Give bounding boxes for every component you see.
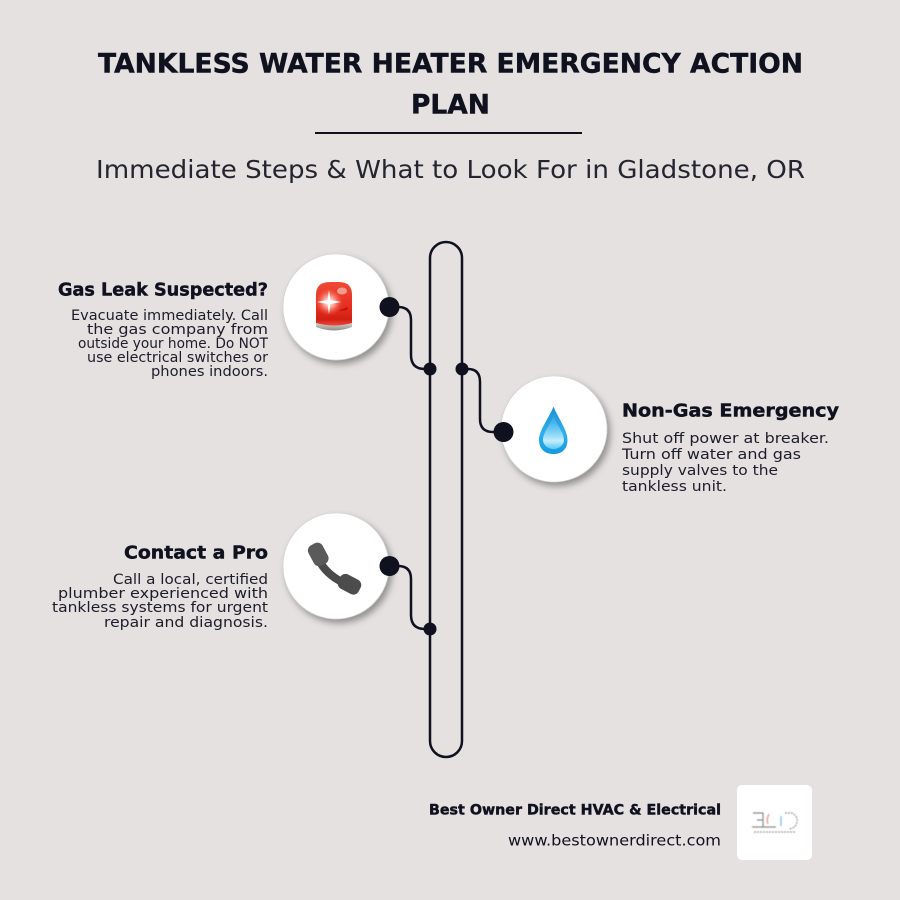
text: gas leak body [71, 308, 268, 380]
connector: contact a pro to track [389, 566, 436, 636]
title [98, 48, 803, 120]
icon circle: non-gas [501, 376, 607, 482]
icon: telephone handset [306, 541, 363, 597]
logo card [737, 785, 812, 860]
icon: red siren [315, 282, 352, 330]
connector: non-gas to track [456, 362, 503, 432]
title underline [315, 132, 582, 134]
text: contact body [52, 572, 268, 631]
panel: contact a pro [52, 513, 389, 631]
text: gas leak heading: Gas Leak Suspected? [58, 280, 268, 300]
text: contact body: Call a local, certified [113, 572, 268, 588]
text: contact body: plumber experienced with [58, 586, 268, 602]
panel: gas leak [58, 254, 389, 380]
footer company name: Best Owner Direct HVAC & Electrical [429, 802, 721, 818]
text: gas leak body: the gas company from [87, 322, 268, 338]
text: non-gas body: tankless unit. [622, 479, 727, 495]
text: contact body: repair and diagnosis. [104, 615, 268, 631]
icon circle: gas leak [283, 254, 389, 360]
connector: gas leak to track [389, 307, 436, 376]
central timeline track [430, 242, 462, 757]
text: non-gas body: Shut off power at breaker. [622, 431, 829, 447]
panel: non-gas emergency [501, 376, 839, 495]
text: non-gas body: Turn off water and gas [621, 447, 801, 463]
icon circle: contact [283, 513, 389, 619]
icon: water drop [539, 406, 568, 454]
text: non-gas heading: Non-Gas Emergency [622, 400, 839, 422]
text: non-gas body: supply valves to the [622, 463, 778, 479]
footer website: www.bestownerdirect.com [508, 832, 721, 850]
large connector dots [380, 297, 514, 576]
text: gas leak body: phones indoors. [151, 364, 268, 380]
text: contact body: tankless systems for urgent [52, 600, 268, 616]
text: contact heading: Contact a Pro [124, 542, 268, 564]
text: non-gas body [621, 431, 829, 495]
title: PLAN [411, 90, 490, 120]
text: gas leak body: Evacuate immediately. Call [71, 308, 268, 324]
text: gas leak body: outside your home. Do NOT [78, 336, 268, 352]
text: gas leak body: use electrical switches or [87, 350, 268, 366]
subtitle: Immediate Steps & What to Look For in Gladstone, OR [96, 155, 805, 184]
logo mark [752, 813, 797, 832]
title: TANKLESS WATER HEATER EMERGENCY ACTION [98, 48, 803, 80]
